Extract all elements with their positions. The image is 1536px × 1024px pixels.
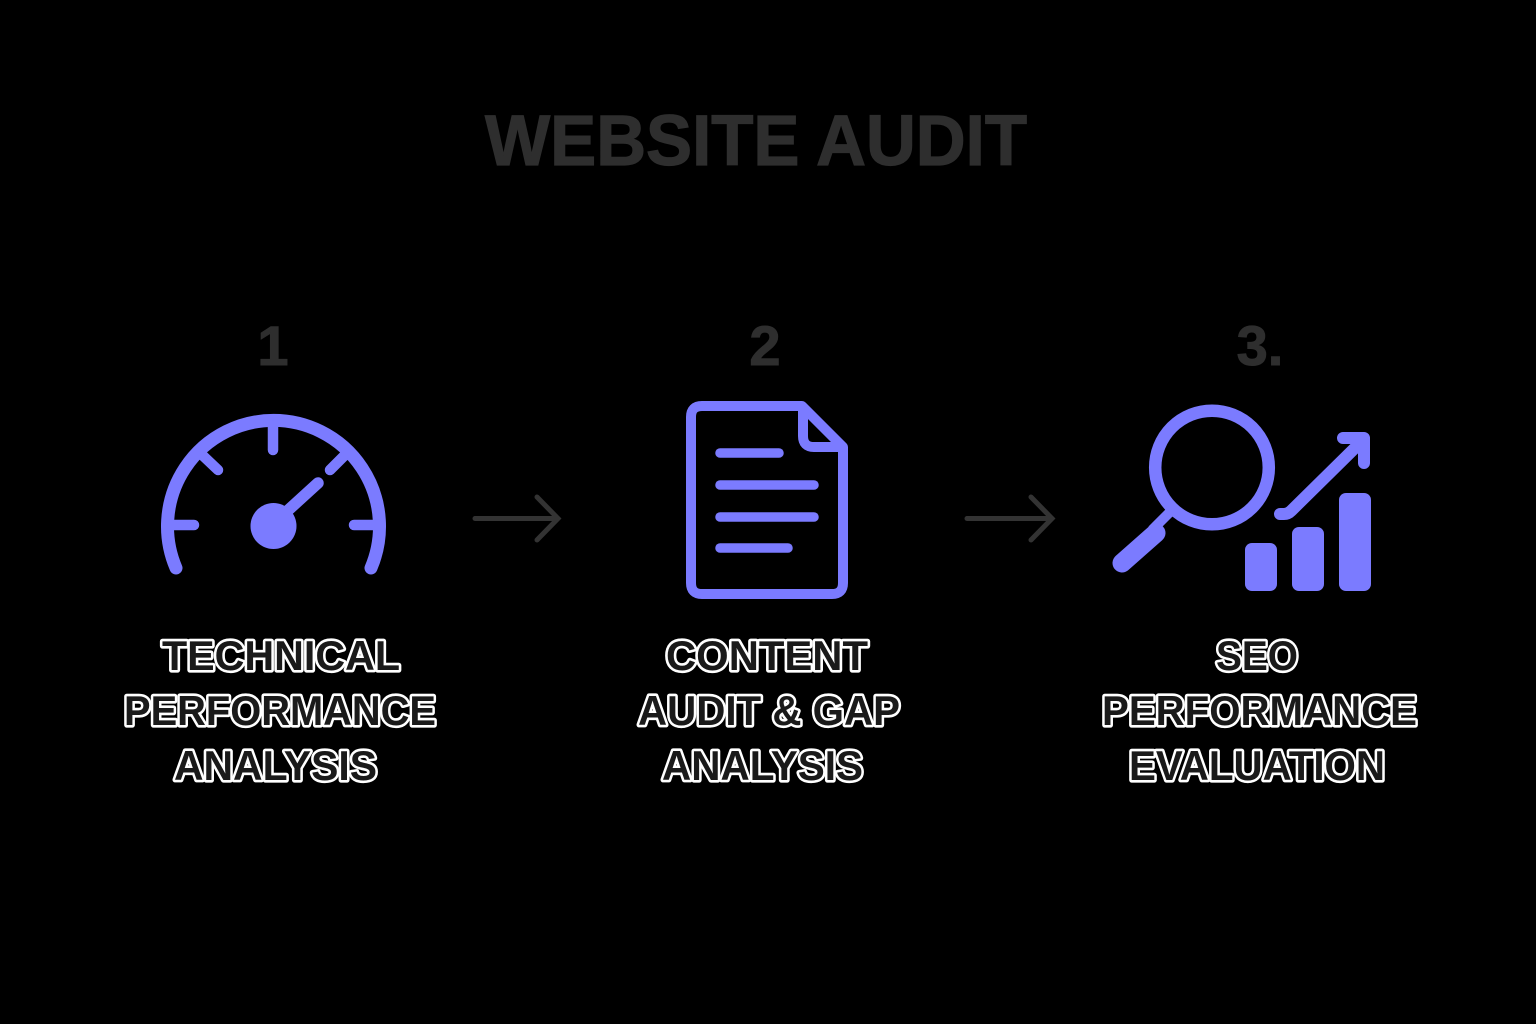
icon: magnifier with growth chart bbox=[1122, 411, 1371, 591]
label: content audit and gap analysis bbox=[638, 632, 900, 789]
label: technical performance analysis: PERFORMANCE bbox=[124, 687, 436, 734]
icon: speedometer gauge bbox=[168, 420, 380, 568]
label: seo performance evaluation: SEO bbox=[1216, 632, 1298, 679]
step number 3: 3. bbox=[1237, 314, 1283, 377]
label: technical performance analysis: TECHNICAL bbox=[162, 632, 400, 679]
label: seo performance evaluation: PERFORMANCE bbox=[1102, 687, 1417, 734]
step number 1: 1 bbox=[257, 314, 289, 377]
label: content audit and gap analysis: AUDIT & GAP bbox=[638, 687, 900, 734]
arrow 2 to 3 bbox=[967, 497, 1052, 540]
label: seo performance evaluation: EVALUATION bbox=[1129, 742, 1385, 789]
title: WEBSITE AUDIT bbox=[485, 102, 1027, 181]
icon: document bbox=[691, 406, 843, 594]
arrow 1 to 2 bbox=[475, 497, 558, 540]
label: technical performance analysis: ANALYSIS bbox=[174, 742, 377, 789]
label: content audit and gap analysis: ANALYSIS bbox=[662, 742, 863, 789]
label: content audit and gap analysis: CONTENT bbox=[666, 632, 868, 679]
label: seo performance evaluation bbox=[1102, 632, 1417, 789]
label: technical performance analysis bbox=[124, 632, 436, 789]
step number 2: 2 bbox=[749, 314, 781, 377]
